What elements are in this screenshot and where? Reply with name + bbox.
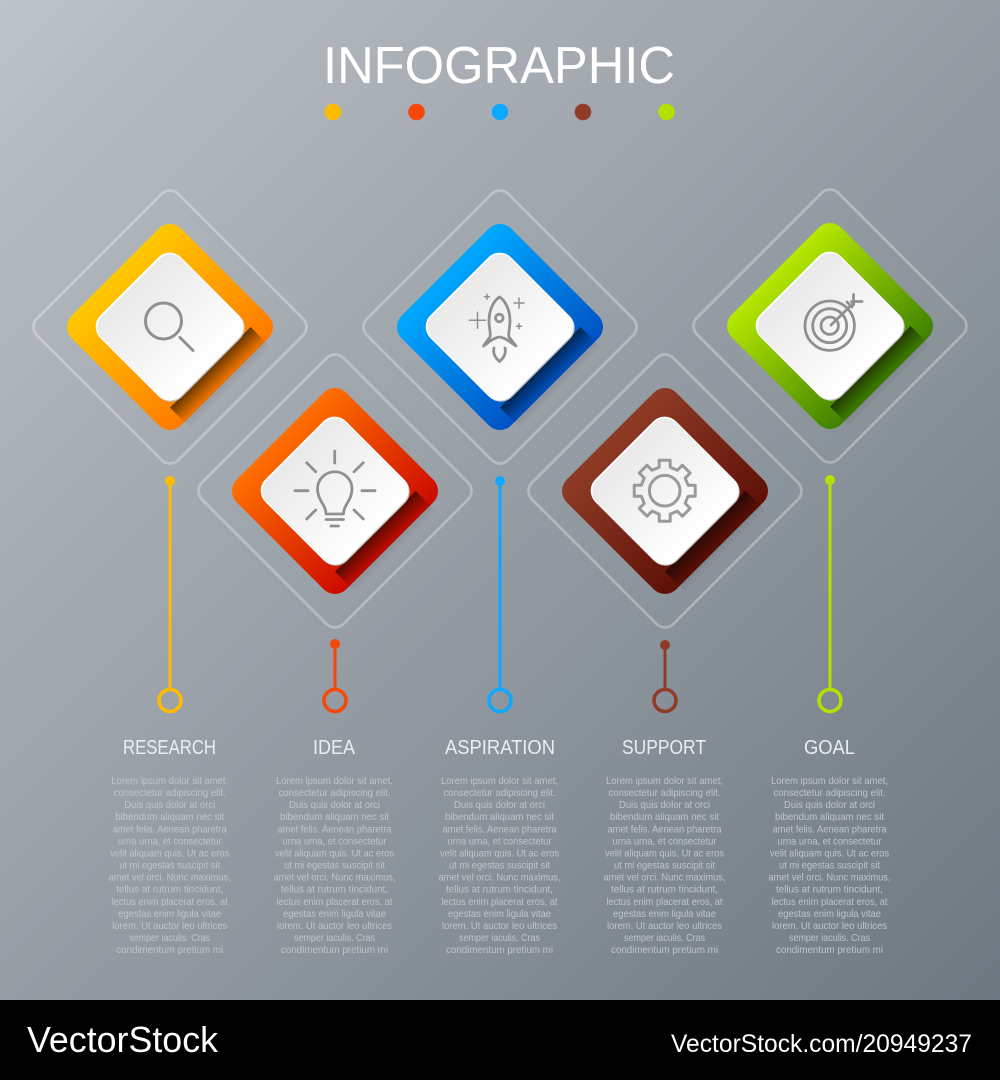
text block: research: amet felis. Aenean pharetra — [113, 824, 227, 835]
text block: support: lorem. Ut auctor leo ultrices — [607, 921, 722, 932]
text block: aspiration: amet vel orci. Nunc maximus, — [438, 873, 560, 884]
text block: idea: lorem. Ut auctor leo ultrices — [277, 921, 392, 932]
connector: aspiration — [489, 476, 511, 712]
text block: aspiration — [438, 776, 560, 956]
text block: idea: velit aliquam quis. Ut ac eros — [275, 848, 394, 860]
text block: research: egestas enim ligula vitae — [118, 909, 222, 920]
text block: research: semper iaculis. Cras — [129, 933, 210, 944]
text block: aspiration: lorem. Ut auctor leo ultrices — [442, 921, 557, 932]
text block: idea: condimentum pretium mi — [281, 945, 388, 956]
text block: research: tellus at rutrum tincidunt, — [116, 885, 223, 896]
text block: aspiration: ut mi egestas suscipit sit — [449, 860, 550, 872]
text block: support: urna urna, et consectetur — [612, 836, 717, 847]
icon: gear — [634, 460, 695, 521]
text block: research: Duis quis dolor at orci — [124, 800, 215, 811]
text block: goal: lectus enim placerat eros, at — [772, 897, 888, 908]
text block: goal: Lorem ipsum dolor sit amet, — [771, 776, 888, 787]
text block: idea: urna urna, et consectetur — [282, 836, 387, 847]
text block: goal: amet vel orci. Nunc maximus, — [768, 873, 890, 884]
text block: aspiration: egestas enim ligula vitae — [448, 909, 551, 920]
text block: research: amet vel orci. Nunc maximus, — [109, 873, 231, 884]
connector: support — [654, 640, 676, 712]
text block: goal: urna urna, et consectetur — [778, 836, 882, 847]
colour dots row — [325, 104, 675, 120]
text block: research: lorem. Ut auctor leo ultrices — [112, 921, 227, 932]
text block: aspiration: lectus enim placerat eros, at — [442, 897, 558, 908]
heading: research: RESEARCH — [123, 737, 216, 759]
text block: support: bibendum aliquam nec sit — [610, 812, 719, 823]
icon: rocket — [470, 294, 524, 362]
diamond 3: aspiration — [359, 186, 641, 468]
heading: support: SUPPORT — [622, 737, 706, 759]
text block: idea: ut mi egestas suscipit sit — [284, 860, 385, 872]
diamond 2: idea — [194, 350, 476, 632]
text block: goal — [768, 776, 890, 956]
text block: goal: semper iaculis. Cras — [789, 933, 870, 944]
text block: goal: velit aliquam quis. Ut ac eros — [770, 848, 889, 860]
text block: research: velit aliquam quis. Ut ac eros — [110, 848, 229, 860]
diamond 5: goal — [689, 185, 971, 467]
text block: idea: egestas enim ligula vitae — [283, 909, 386, 920]
text block: aspiration: semper iaculis. Cras — [459, 933, 540, 944]
text block: research — [109, 776, 231, 956]
text block: support: semper iaculis. Cras — [624, 933, 705, 944]
text block: idea: lectus enim placerat eros, at — [276, 897, 393, 908]
text block: idea: Lorem ipsum dolor sit amet, — [276, 776, 393, 787]
text block: goal: ut mi egestas suscipit sit — [779, 860, 880, 872]
text block: research: ut mi egestas suscipit sit — [119, 860, 220, 872]
text block: aspiration: Lorem ipsum dolor sit amet, — [441, 776, 558, 787]
text block: idea: tellus at rutrum tincidunt, — [281, 885, 388, 896]
text block: research: urna urna, et consectetur — [118, 836, 222, 847]
text block: aspiration: urna urna, et consectetur — [448, 836, 552, 847]
text block: goal: amet felis. Aenean pharetra — [772, 824, 887, 835]
text block: support: tellus at rutrum tincidunt, — [611, 885, 718, 896]
text block: goal: bibendum aliquam nec sit — [775, 812, 884, 823]
text block: idea: bibendum aliquam nec sit — [280, 812, 389, 823]
text block: research: condimentum pretium mi — [116, 945, 223, 956]
text block: aspiration: bibendum aliquam nec sit — [445, 812, 554, 823]
text block: support — [604, 776, 726, 956]
text block: goal: Duis quis dolor at orci — [784, 800, 875, 811]
text block: idea: Duis quis dolor at orci — [289, 800, 380, 811]
text block: idea — [274, 776, 396, 956]
title: INFOGRAPHIC — [323, 37, 675, 95]
text block: idea: consectetur adipiscing elit. — [278, 788, 390, 799]
heading: aspiration: ASPIRATION — [445, 737, 555, 759]
text block: idea: amet felis. Aenean pharetra — [278, 824, 392, 835]
text block: research: bibendum aliquam nec sit — [115, 812, 224, 823]
text block: aspiration: amet felis. Aenean pharetra — [442, 824, 557, 835]
text block: aspiration: Duis quis dolor at orci — [454, 800, 545, 811]
text block: support: Lorem ipsum dolor sit amet, — [606, 776, 723, 787]
text block: support: condimentum pretium mi — [611, 945, 718, 956]
footer logo text: VectorStock — [27, 1019, 219, 1060]
text block: research: lectus enim placerat eros, at — [112, 897, 228, 908]
text block: support: velit aliquam quis. Ut ac eros — [605, 848, 724, 860]
text block: support: amet vel orci. Nunc maximus, — [604, 873, 726, 884]
text block: goal: tellus at rutrum tincidunt, — [776, 885, 883, 896]
text block: support: Duis quis dolor at orci — [619, 800, 710, 811]
text block: idea: semper iaculis. Cras — [294, 933, 375, 944]
icon: light bulb — [295, 451, 375, 526]
text block: support: consectetur adipiscing elit. — [608, 788, 720, 799]
text block: goal: condimentum pretium mi — [776, 945, 883, 956]
heading: goal: GOAL — [804, 737, 855, 759]
icon: magnifier — [146, 303, 193, 350]
connector: goal — [819, 475, 841, 712]
text block: research: consectetur adipiscing elit. — [114, 788, 226, 799]
footer bar — [0, 1000, 1000, 1080]
diamond 1: research — [29, 186, 311, 468]
text block: support: egestas enim ligula vitae — [613, 909, 716, 920]
text block: research: Lorem ipsum dolor sit amet, — [111, 776, 228, 787]
connector: idea — [324, 639, 346, 712]
diamond 4: support — [524, 350, 806, 632]
text block: goal: lorem. Ut auctor leo ultrices — [772, 921, 887, 932]
text block: aspiration: condimentum pretium mi — [446, 945, 553, 956]
heading: idea: IDEA — [313, 737, 356, 759]
text block: goal: egestas enim ligula vitae — [778, 909, 881, 920]
footer id text: VectorStock.com/20949237 — [671, 1030, 972, 1058]
icon: target — [805, 294, 862, 350]
text block: idea: amet vel orci. Nunc maximus, — [274, 873, 396, 884]
text block: support: amet felis. Aenean pharetra — [608, 824, 722, 835]
connector: research — [159, 476, 181, 712]
text block: goal: consectetur adipiscing elit. — [774, 788, 886, 799]
text block: support: lectus enim placerat eros, at — [606, 897, 723, 908]
text block: aspiration: velit aliquam quis. Ut ac eros — [440, 848, 559, 860]
text block: aspiration: tellus at rutrum tincidunt, — [446, 885, 553, 896]
text block: support: ut mi egestas suscipit sit — [614, 860, 715, 872]
text block: aspiration: consectetur adipiscing elit. — [444, 788, 556, 799]
